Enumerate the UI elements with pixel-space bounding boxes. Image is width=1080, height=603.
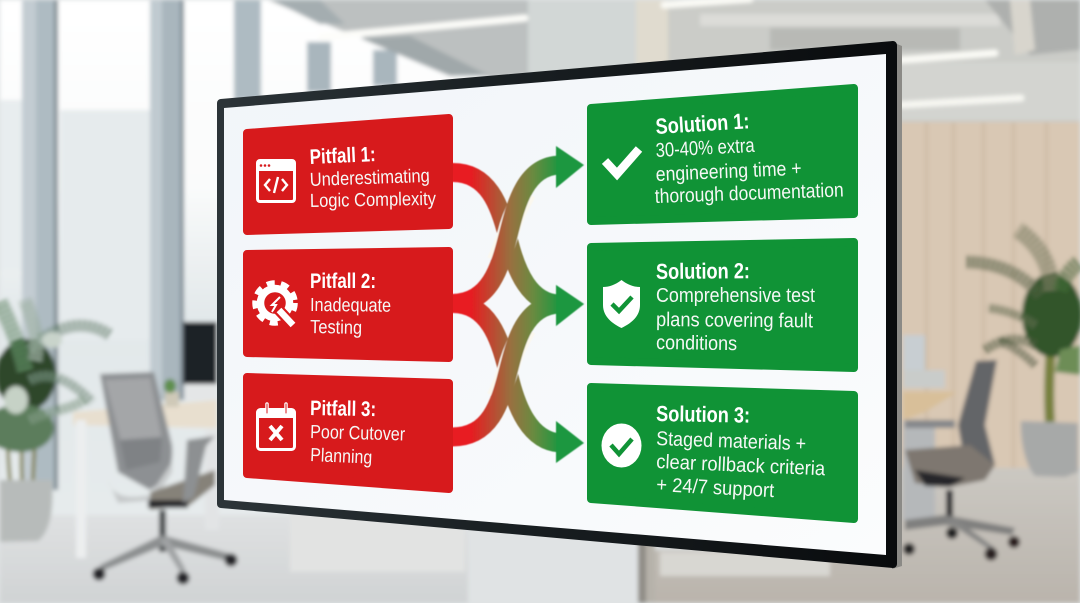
ceiling light bbox=[322, 18, 525, 37]
left pot bbox=[0, 480, 52, 542]
text: solution 2 body: plans covering fault bbox=[656, 309, 814, 332]
column bbox=[528, 0, 636, 80]
heading: solution 2: Solution 2: bbox=[656, 258, 750, 284]
text: pitfall 2 body bbox=[310, 295, 391, 339]
window wall bbox=[0, 0, 530, 530]
text: solution 2 body bbox=[656, 285, 815, 355]
heading: pitfall 1: Pitfall 1: bbox=[309, 143, 376, 169]
text: solution 2 body: Comprehensive test bbox=[656, 285, 815, 307]
text: solution 3 body bbox=[656, 428, 826, 502]
wood wall bbox=[890, 122, 1080, 472]
right desk and chair bbox=[903, 335, 1020, 560]
arrow: pitfall 2 to solution 1 bbox=[452, 146, 584, 304]
floors bbox=[0, 515, 480, 603]
arrow: pitfall 2 to solution 3 bbox=[452, 303, 584, 463]
monitor stand bbox=[468, 525, 640, 603]
ceiling left bbox=[268, 0, 540, 78]
text: solution 1 body: 30-40% extra bbox=[655, 135, 756, 162]
text: solution 3 body: + 24/7 support bbox=[656, 474, 775, 502]
icon: calendar with x bbox=[257, 404, 295, 450]
arrow: pitfall 1 to solution 2 bbox=[452, 172, 584, 326]
left cabinet bbox=[290, 510, 465, 572]
heading: pitfall 2: Pitfall 2: bbox=[310, 270, 376, 293]
monitor bbox=[221, 42, 902, 569]
icon: code window bbox=[257, 160, 295, 202]
icon: circled check bbox=[602, 424, 642, 468]
monitor side edge bbox=[892, 42, 902, 569]
crossing arrows bbox=[452, 146, 584, 463]
left desk bbox=[73, 322, 217, 558]
icon: shield with check bbox=[603, 280, 640, 328]
text: solution 1 body bbox=[654, 135, 844, 208]
monitor screen bbox=[224, 54, 886, 555]
right plant bbox=[965, 230, 1080, 422]
text: solution 3 body: clear rollback criteria bbox=[656, 451, 826, 480]
heading: solution 1: Solution 1: bbox=[655, 108, 750, 139]
panel: pitfall 3 bbox=[247, 377, 449, 489]
heading: pitfall 3: Pitfall 3: bbox=[310, 397, 376, 421]
left plant bbox=[0, 300, 110, 480]
text: solution 1 body: thorough documentation bbox=[654, 179, 844, 208]
arrow: pitfall 3 to solution 2 bbox=[452, 285, 584, 437]
panel: solution 2 bbox=[591, 242, 854, 368]
monitor bezel bbox=[221, 45, 893, 564]
icon: gear with wrench bbox=[255, 283, 295, 325]
text: pitfall 2 body: Inadequate bbox=[310, 295, 391, 317]
text: pitfall 1 body: Logic Complexity bbox=[310, 189, 437, 212]
text: pitfall 1 body bbox=[309, 166, 437, 212]
panel: pitfall 2 bbox=[247, 251, 449, 358]
right pot bbox=[1021, 421, 1078, 477]
text: pitfall 3 body: Poor Cutover bbox=[310, 422, 406, 445]
left chair bbox=[92, 372, 238, 584]
text: solution 3 body: Staged materials + bbox=[656, 428, 807, 455]
heading: solution 3: Solution 3: bbox=[656, 401, 750, 428]
text: pitfall 2 body: Testing bbox=[310, 317, 362, 339]
panel: pitfall 1 bbox=[247, 118, 449, 231]
text: pitfall 3 body bbox=[310, 422, 406, 469]
text: pitfall 1 body: Underestimating bbox=[309, 166, 430, 191]
text: solution 2 body: conditions bbox=[656, 332, 737, 355]
text: solution 1 body: engineering time + bbox=[655, 158, 802, 186]
panel: solution 3 bbox=[591, 387, 854, 519]
text: pitfall 3 body: Planning bbox=[310, 445, 373, 469]
icon: check mark bbox=[605, 149, 639, 174]
panel: solution 1 bbox=[591, 88, 854, 221]
ceiling right bbox=[668, 0, 1080, 125]
